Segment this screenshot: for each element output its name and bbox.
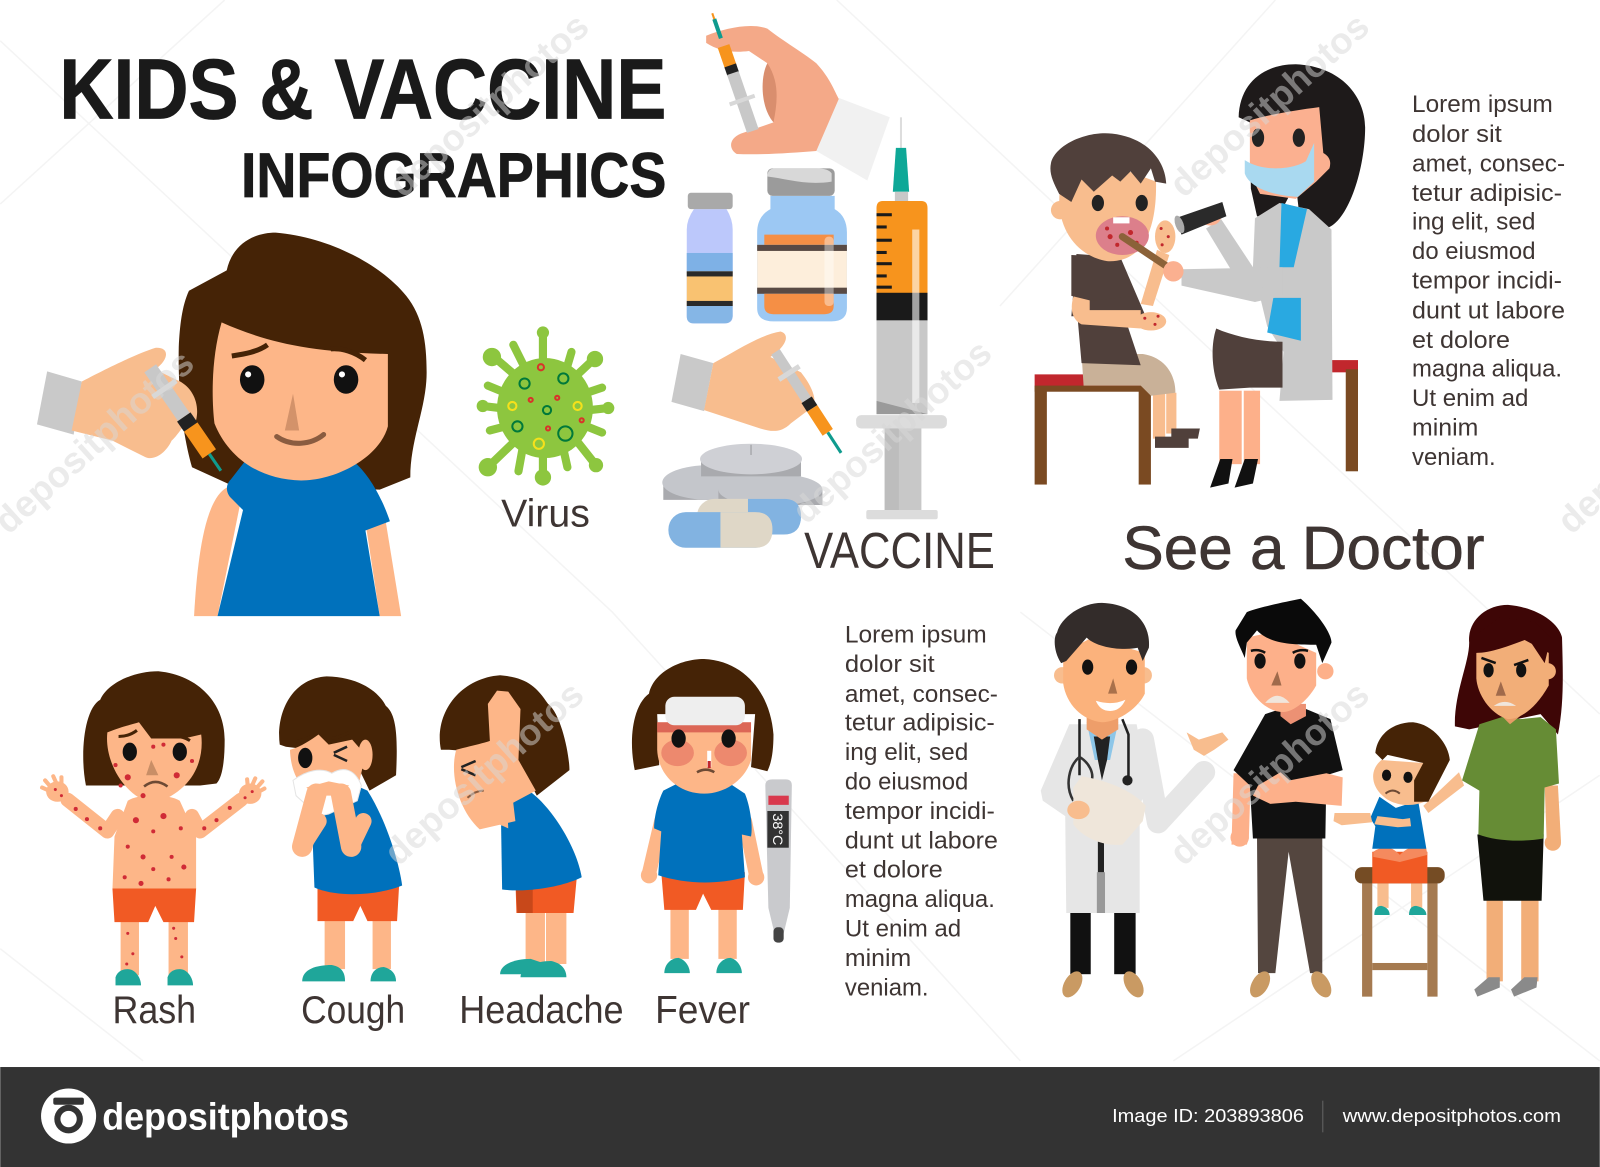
label: Headache: Headache — [459, 989, 624, 1032]
icon: large vial — [757, 168, 847, 321]
label: watermarks: depositphotos — [376, 673, 591, 873]
label: Virus: Virus — [501, 492, 590, 535]
illustration: hand holding syringe (lower) — [671, 332, 851, 460]
illustration: mother — [1455, 605, 1563, 997]
title: KIDS & VACCINE — [59, 41, 666, 137]
label: watermarks: depositphotos — [1161, 673, 1377, 873]
text block: top right: tetur adipisic- — [1412, 180, 1562, 207]
icon: thermometer: 38°C — [769, 813, 785, 845]
label: watermarks: depositphotos — [1161, 5, 1377, 205]
text block: middle: tetur adipisic- — [845, 709, 995, 736]
text block: middle: dunt ut labore — [845, 828, 998, 855]
text block: middle: minim — [845, 945, 911, 972]
image id: Image ID: 203893806 — [1112, 1105, 1304, 1126]
text block: middle: ing elit, sed — [845, 739, 968, 766]
text block: top right: ing elit, sed — [1412, 209, 1535, 236]
text block: middle: et dolore — [845, 856, 943, 883]
label: Rash: Rash — [112, 989, 196, 1032]
label: Cough: Cough — [301, 989, 405, 1032]
illustration: father — [1230, 599, 1343, 1001]
text block: top right: dunt ut labore — [1412, 297, 1565, 324]
text block: middle: magna aliqua. — [845, 886, 995, 913]
text block: top right: do eiusmod — [1412, 238, 1535, 265]
text block: middle: amet, consec- — [845, 681, 998, 708]
symptom figure: fever — [632, 659, 792, 973]
text block: middle — [845, 622, 998, 1002]
footer bar — [0, 1067, 1600, 1167]
icon: pills and capsules — [662, 444, 822, 548]
text block: middle: Ut enim ad — [845, 915, 961, 942]
label: watermarks: depositphotos — [784, 332, 999, 531]
boy — [1050, 133, 1200, 448]
icon: small vial — [687, 193, 733, 323]
text block: middle: veniam. — [845, 975, 929, 1002]
text block: middle: tempor incidi- — [845, 798, 995, 825]
text block: middle: Lorem ipsum — [845, 622, 987, 649]
website: www.depositphotos.com — [1342, 1105, 1561, 1126]
symptom figure: rash — [42, 671, 264, 985]
text block: top right: minim — [1412, 415, 1478, 442]
icon: thermometer — [765, 779, 792, 943]
label: watermarks — [0, 5, 1600, 873]
text block: top right — [1412, 91, 1565, 471]
text block: top right: et dolore — [1412, 327, 1510, 354]
icon: camera logo — [41, 1088, 96, 1144]
text block: top right: tempor incidi- — [1412, 268, 1562, 295]
label: VACCINE: VACCINE — [804, 522, 995, 579]
label: Fever: Fever — [655, 989, 750, 1032]
illustration: girl receiving injection — [37, 233, 427, 616]
illustration: doctor examining boy — [1035, 64, 1365, 488]
label: watermarks: depositphotos — [381, 5, 597, 205]
illustration: large syringe — [856, 117, 947, 519]
symptom figure: headache — [440, 675, 582, 977]
female doctor — [1163, 64, 1365, 488]
title: INFOGRAPHICS — [241, 141, 666, 211]
title — [59, 41, 666, 211]
text block: top right: veniam. — [1412, 444, 1496, 471]
text block: top right: magna aliqua. — [1412, 355, 1562, 382]
text block: top right: Ut enim ad — [1412, 385, 1528, 412]
heading: See a Doctor: See a Doctor — [1122, 514, 1484, 582]
illustration: child on stool — [1334, 722, 1464, 997]
symptom figure: cough — [279, 676, 402, 981]
text block: top right: dolor sit — [1412, 121, 1502, 148]
text block: top right: amet, consec- — [1412, 150, 1565, 177]
illustration: male doctor — [1041, 603, 1228, 1001]
stools — [1035, 360, 1358, 485]
icon: virus — [477, 326, 614, 486]
icon: gloved hand with syringe — [37, 348, 233, 479]
text block: middle: do eiusmod — [845, 769, 968, 796]
text block: middle: dolor sit — [845, 651, 935, 678]
logo text: depositphotos — [102, 1095, 349, 1137]
illustration: hand holding syringe (top) — [700, 9, 890, 181]
text block: top right: Lorem ipsum — [1412, 91, 1553, 118]
